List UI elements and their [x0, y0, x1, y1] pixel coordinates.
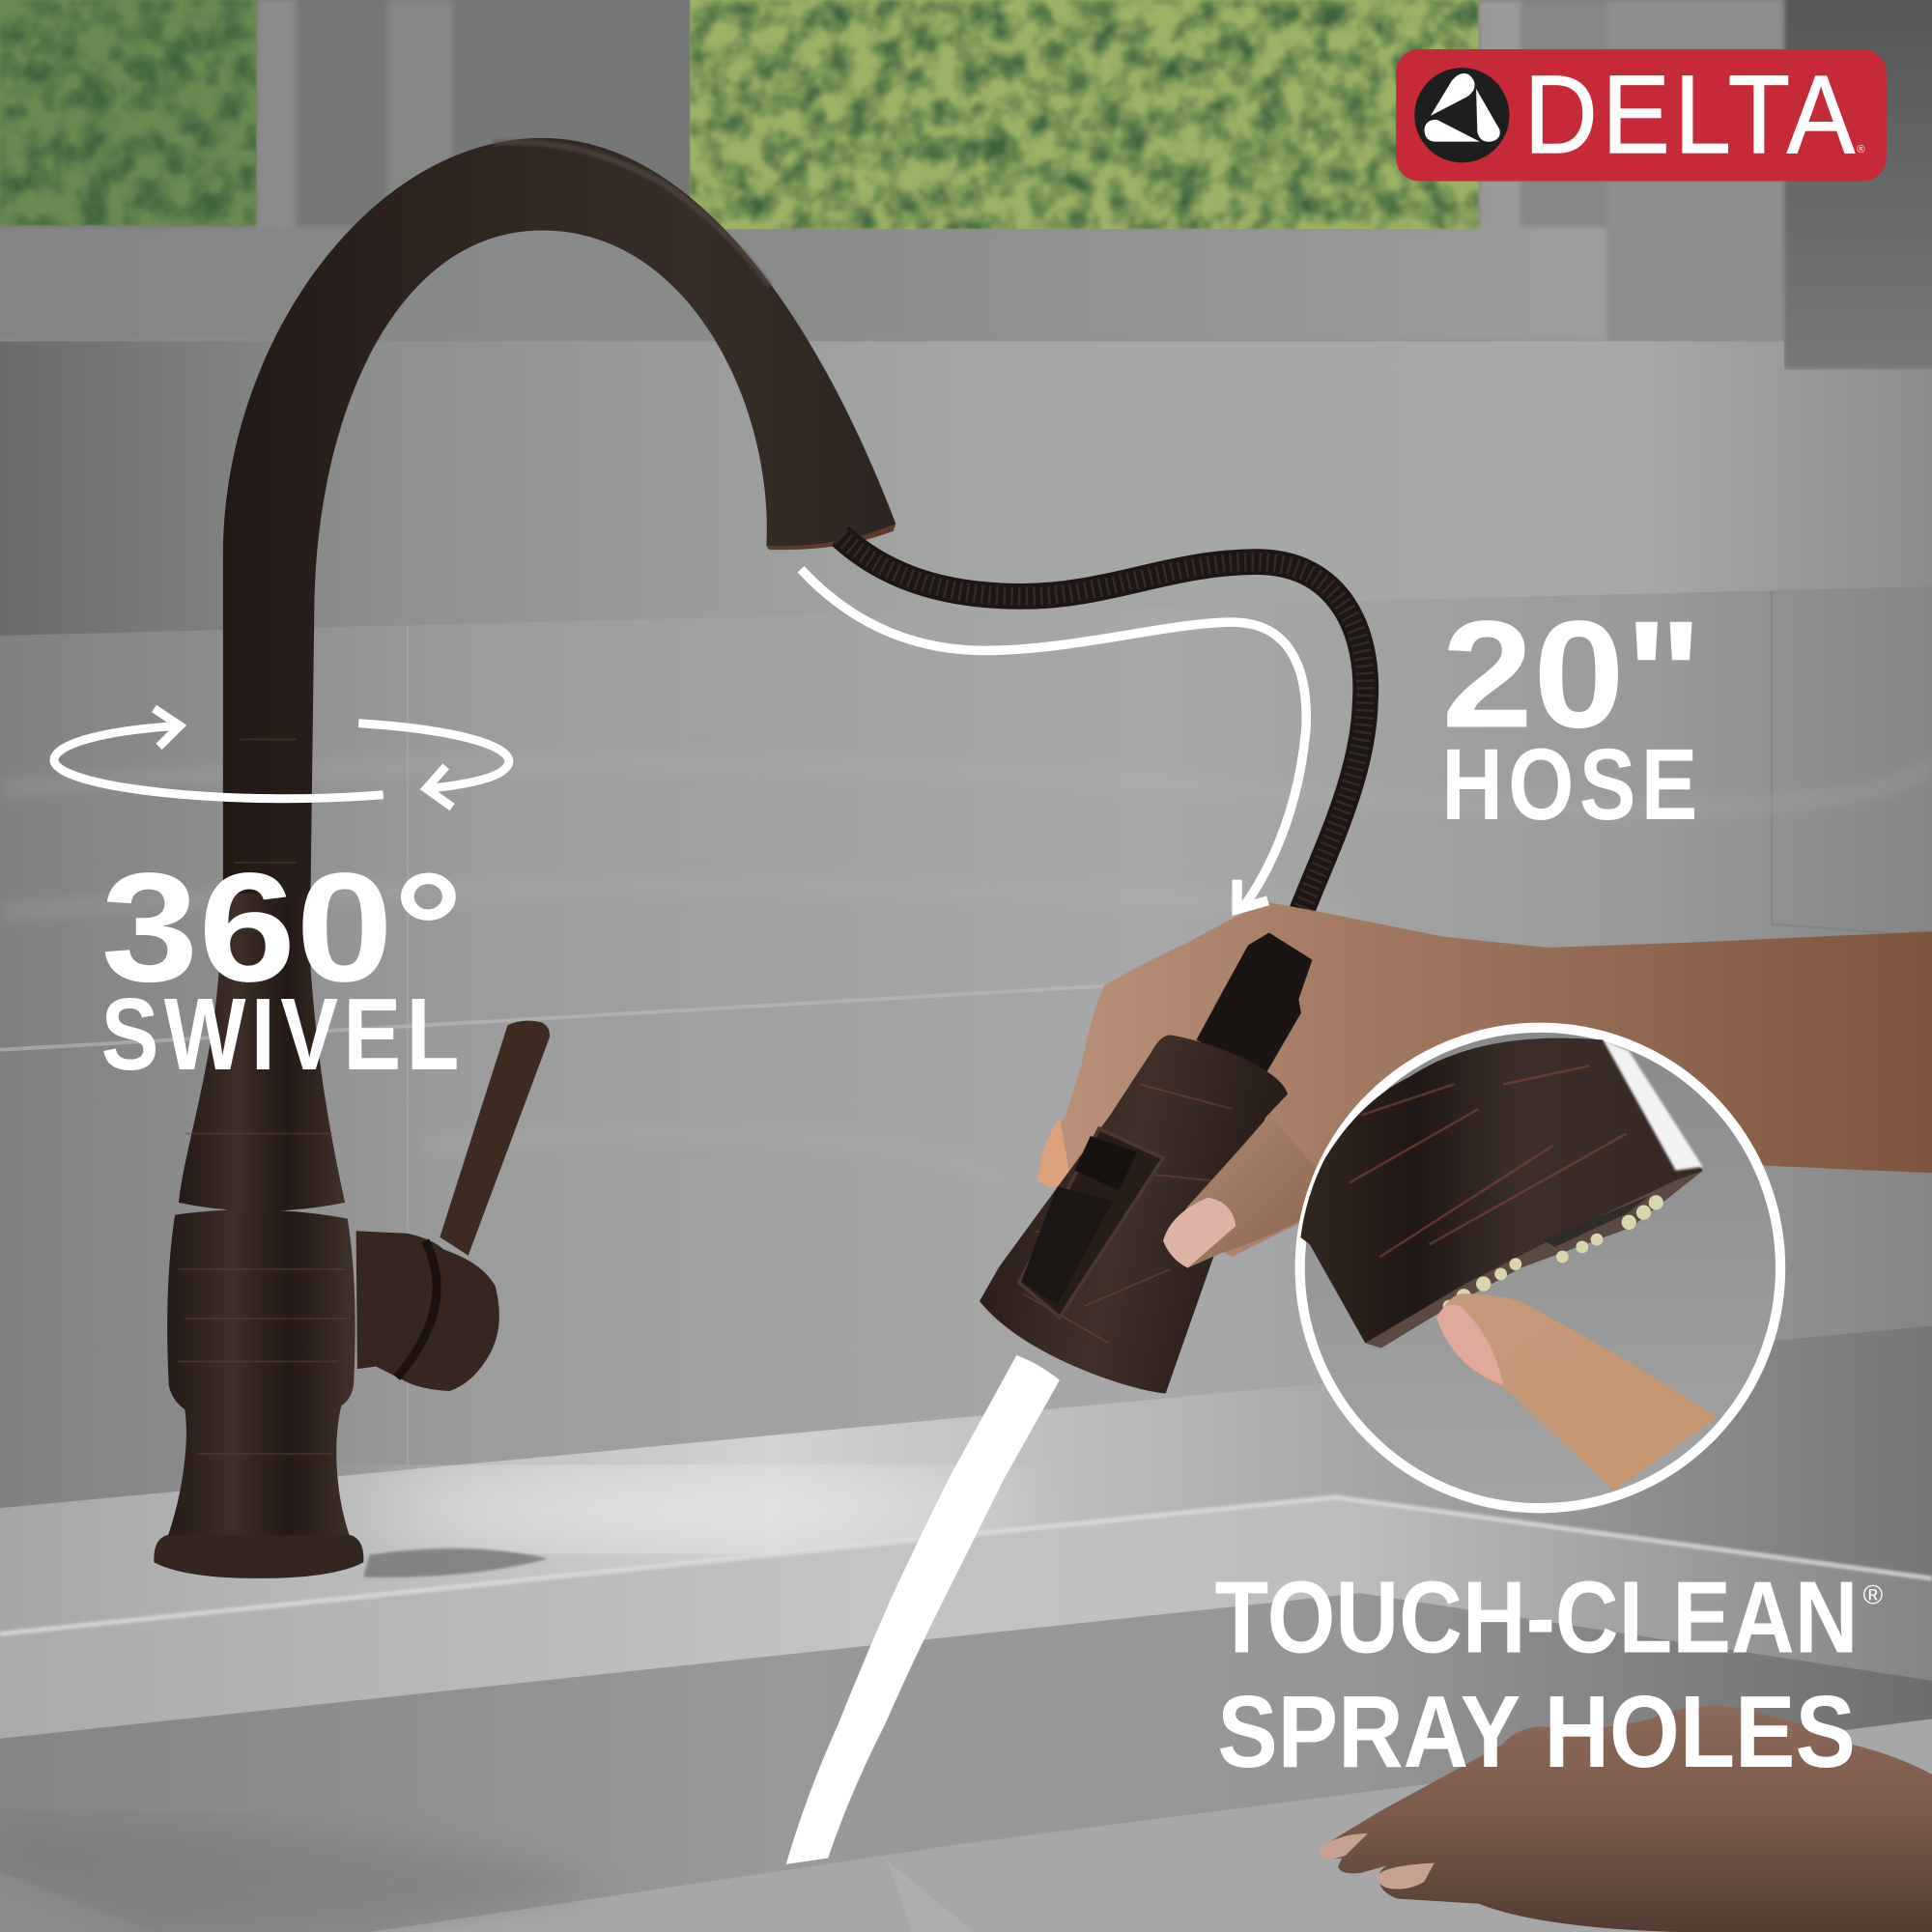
spray head close-up [1293, 1038, 1703, 1348]
label: 360 swivel [101, 841, 465, 1092]
label: 20 inch hose: 20" [1441, 589, 1703, 760]
registered mark: ® [1857, 144, 1865, 156]
nails [1319, 1833, 1435, 1889]
arrow: hose length [801, 569, 1306, 909]
logo: Delta [1396, 49, 1887, 181]
label: 20 inch hose [1441, 589, 1703, 841]
faucet body [154, 138, 895, 1578]
thumb nail [1163, 1198, 1236, 1267]
handle hub [356, 1231, 499, 1391]
icon: swivel arrows [54, 708, 509, 807]
water stream [786, 1355, 1060, 1864]
thumb [1163, 1115, 1319, 1267]
wordmark: DELTA [1524, 53, 1860, 177]
spray face rim [1365, 1171, 1703, 1348]
lever [440, 1021, 550, 1256]
base [154, 1535, 363, 1578]
registered mark: ® [1863, 1580, 1884, 1610]
label: touch-clean spray holes [1215, 1560, 1884, 1789]
sprayer [980, 933, 1312, 1394]
hose caption: HOSE [1441, 728, 1703, 841]
lower hand [1319, 1706, 1932, 1932]
spray face [1543, 1197, 1649, 1247]
spout opening [766, 524, 895, 550]
lower body [166, 1209, 355, 1540]
spray nozzles [1443, 1195, 1663, 1312]
spout [223, 138, 895, 899]
upper button [1074, 1136, 1137, 1190]
chrome highlight [1603, 1040, 1703, 1171]
brushed bronze streaks [179, 739, 352, 1454]
swivel caption: SWIVEL [101, 978, 465, 1092]
neck [179, 894, 345, 1211]
spray holes caption: SPRAY HOLES [1217, 1675, 1856, 1789]
window view: left [0, 0, 256, 225]
sprayer neck [1197, 933, 1312, 1074]
finger nails [1037, 1119, 1072, 1188]
window view: centre [690, 0, 1479, 229]
spout highlight [493, 142, 770, 286]
icon: Delta emblem [1414, 68, 1509, 162]
label: 360 swivel: 360° [101, 841, 464, 1014]
braided hose [840, 536, 1366, 949]
fingernail [1436, 1304, 1503, 1385]
sprayer head [980, 1035, 1288, 1394]
callout: touch-clean spray holes [1293, 1028, 1780, 1508]
fingertip [1436, 1293, 1718, 1491]
hand holding sprayer [1037, 902, 1932, 1257]
lower button [1021, 1186, 1113, 1305]
button surround [1019, 1128, 1163, 1318]
